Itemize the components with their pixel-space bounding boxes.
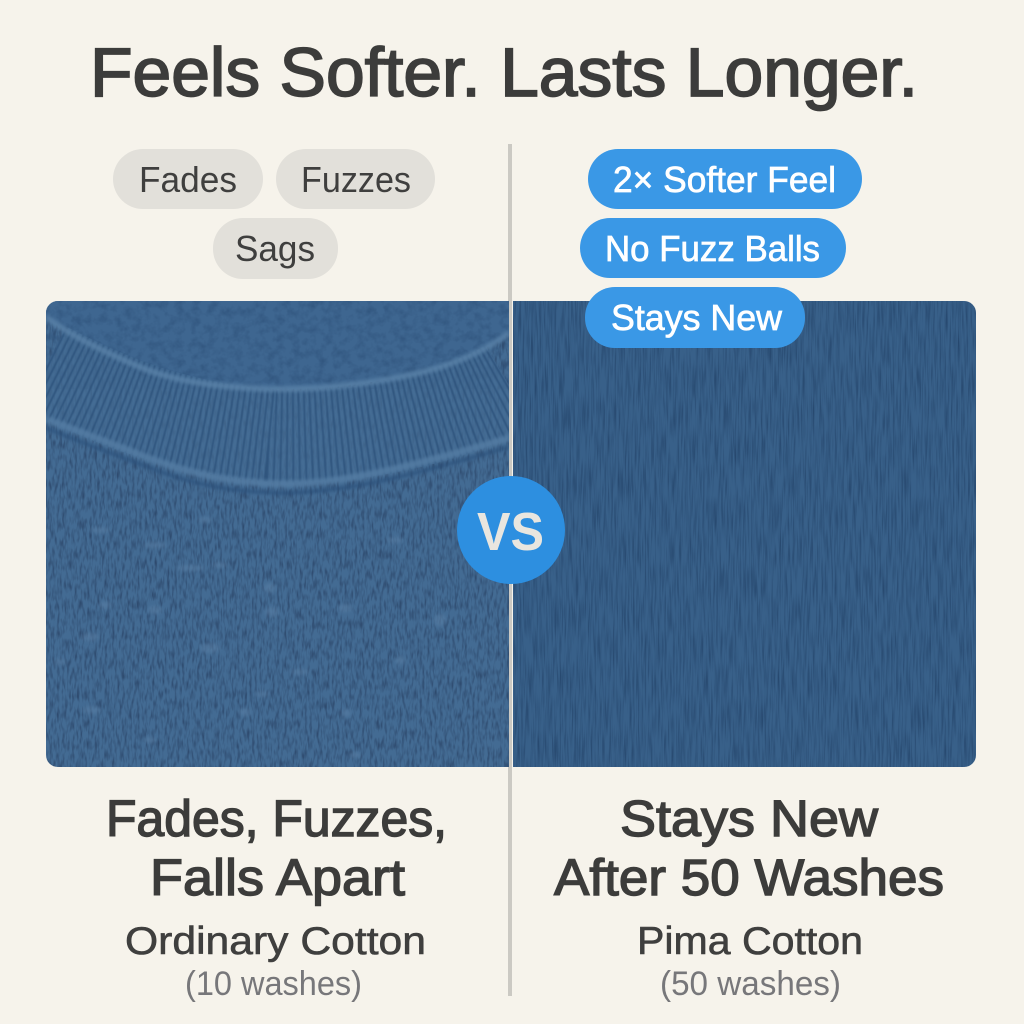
heading: ordinary cotton result bbox=[106, 790, 447, 906]
heading: ordinary cotton result: Falls Apart bbox=[150, 849, 405, 906]
pill: Fuzzes: Fuzzes bbox=[301, 159, 411, 200]
label: pima cotton: Pima Cotton bbox=[637, 920, 863, 963]
heading: ordinary cotton result: Fades, Fuzzes, bbox=[106, 790, 447, 847]
pill: Sags bbox=[213, 218, 338, 279]
pill: No Fuzz Balls bbox=[580, 218, 846, 278]
pill: Sags: Sags bbox=[235, 228, 315, 269]
vs badge: VS bbox=[477, 502, 544, 562]
vs badge bbox=[457, 476, 565, 584]
heading: pima cotton result: After 50 Washes bbox=[554, 849, 944, 906]
pill: Stays New: Stays New bbox=[611, 297, 783, 338]
pilling fuzz spots bbox=[54, 517, 446, 758]
pill: 2x Softer Feel bbox=[588, 149, 862, 209]
pill: Fades bbox=[113, 149, 263, 209]
label: pima cotton bbox=[637, 920, 863, 1003]
title: Feels Softer. Lasts Longer. bbox=[90, 34, 918, 111]
center divider line bbox=[508, 144, 512, 996]
pill: Fades: Fades bbox=[139, 159, 237, 200]
panel: ordinary cotton fabric bbox=[46, 301, 510, 767]
label: ordinary cotton: (10 washes) bbox=[185, 965, 362, 1003]
pill: Fuzzes bbox=[276, 149, 435, 209]
pill: 2x Softer Feel: 2× Softer Feel bbox=[613, 159, 836, 200]
label: ordinary cotton: Ordinary Cotton bbox=[125, 920, 426, 963]
inside of neck bbox=[46, 301, 509, 389]
panel: pima cotton fabric bbox=[513, 301, 976, 767]
label: ordinary cotton bbox=[125, 920, 426, 1003]
label: pima cotton: (50 washes) bbox=[660, 965, 841, 1003]
pill: Stays New bbox=[585, 287, 805, 348]
heading: pima cotton result bbox=[554, 790, 944, 906]
pill: No Fuzz Balls: No Fuzz Balls bbox=[605, 228, 820, 269]
collar ribbing bbox=[46, 317, 509, 493]
heading: pima cotton result: Stays New bbox=[620, 790, 878, 847]
